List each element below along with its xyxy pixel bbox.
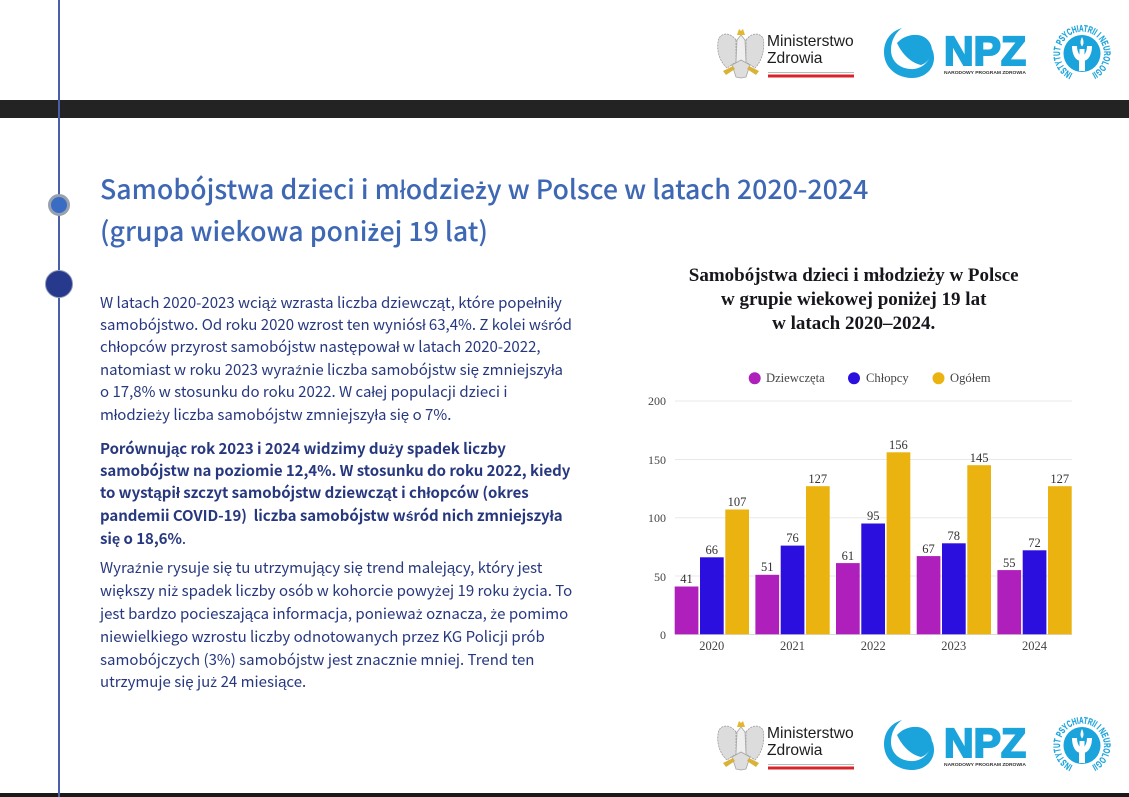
x axis labels: 2023 [941,639,966,653]
logo: NPZ top: NPZ [944,28,1026,74]
logo: Ministerstwo Zdrowia bottom [718,721,854,770]
icon: eagle [718,29,764,78]
y axis and grid: 50 [654,570,666,584]
legend [749,371,991,385]
chart title: Samobójstwa dzieci i młodzieży w Polsce [689,265,1019,286]
logo: NPZ top: NARODOWY PROGRAM ZDROWIA [944,70,1027,75]
timeline with markers [45,0,73,797]
value labels: 72 [1028,536,1041,550]
x axis labels: 2024 [1022,639,1048,653]
bar chart [648,394,1072,653]
logo: Ministerstwo Zdrowia top [718,29,854,78]
paragraph 2 bold: pandemii COVID-19) liczba samobójstw wśród nich zmniejszyła [100,505,563,526]
paragraph 3: jest bardzo pocieszająca informacja, ponieważ oznacza, że pomimo [100,603,568,624]
bars boys [700,524,1046,634]
paragraph 3: samobójczych (3%) samobójstw jest znacznie mniej. Trend ten [100,649,534,670]
top dark band [0,100,1129,118]
value labels: 127 [808,472,827,486]
paragraph 1: chłopców przyrost samobójstw następował w latach 2020-2022, [100,336,541,357]
x axis labels: 2020 [699,639,724,653]
y axis and grid: 0 [660,628,666,642]
x axis labels: 2022 [861,639,886,653]
y axis and grid: 150 [648,453,666,467]
logo: Instytut Psychiatrii i Neurologii bottom: INSTYTUT PSYCHIATRII I NEUROLOGII [1053,716,1111,772]
x axis labels [699,639,1048,653]
logo: Instytut Psychiatrii i Neurologii top: INSTYTUT PSYCHIATRII I NEUROLOGII [1053,24,1111,80]
chart title: w latach 2020–2024. [772,313,935,334]
value labels: 78 [948,529,960,543]
paragraph 2 bold [100,438,570,549]
paragraph 3: Wyraźnie rysuje się tu utrzymujący się trend malejący, który jest [100,557,542,578]
bars total [725,452,1072,634]
paragraph 1: młodzieży liczba samobójstw zmniejszyła się o 7%. [100,404,451,425]
value labels: 67 [922,542,935,556]
paragraph 3: niewielkiego wzrostu liczby odnotowanych przez KG Policji prób [100,626,545,647]
logo: Ministerstwo Zdrowia top: Zdrowia [767,50,823,67]
logo: NPZ bottom: NPZ [944,720,1026,766]
value labels: 127 [1050,472,1069,486]
logo: Ministerstwo Zdrowia bottom: Ministerstwo [767,725,854,742]
paragraph 2 bold: się o 18,6%. [100,528,186,549]
y axis and grid: 200 [648,394,666,408]
logo: NPZ bottom: NARODOWY PROGRAM ZDROWIA [944,762,1027,767]
legend: Chłopcy [866,371,909,385]
value labels: 55 [1003,556,1015,570]
y axis and grid [648,394,1072,642]
x axis labels: 2021 [780,639,805,653]
paragraph 2 bold: to wystąpił szczyt samobójstw dziewcząt i chłopców (okres [100,482,529,503]
value labels: 41 [680,572,693,586]
y axis and grid: 100 [648,511,666,525]
value labels: 51 [761,560,773,574]
bottom dark band [0,793,1129,797]
logo: Ministerstwo Zdrowia top: Ministerstwo [767,33,854,50]
main title [100,168,868,249]
paragraph 1: W latach 2020-2023 wciąż wzrasta liczba dziewcząt, które popełniły [100,292,562,313]
logo: Ministerstwo Zdrowia bottom: Zdrowia [767,742,823,759]
value labels: 66 [706,543,718,557]
icon: eagle [718,721,764,770]
chart title [689,265,1019,334]
chart title: w grupie wiekowej poniżej 19 lat [721,289,987,310]
paragraph 1 [100,292,572,425]
paragraph 3: utrzymuje się już 24 miesiące. [100,671,306,692]
value labels: 107 [728,495,746,509]
paragraph 2 bold: samobójstw na poziomie 12,4%. W stosunku do roku 2022, kiedy [100,460,570,481]
value labels [680,438,1069,586]
paragraph 2 bold: Porównując rok 2023 i 2024 widzimy duży spadek liczby [100,438,506,459]
legend: Ogółem [950,371,991,385]
bars girls [675,556,1021,634]
paragraph 1: o 17,8% w stosunku do roku 2022. W całej populacji dzieci i [100,381,507,402]
value labels: 61 [842,549,854,563]
logo: NPZ top [884,28,1027,78]
paragraph 3 [99,557,572,692]
paragraph 1: natomiast w roku 2023 wyraźnie liczba samobójstw się zmniejszyła [100,359,563,380]
legend: Dziewczęta [766,371,825,385]
value labels: 95 [867,509,879,523]
main title: (grupa wiekowa poniżej 19 lat) [100,210,488,249]
logo: NPZ bottom [884,720,1027,770]
value labels: 156 [889,438,908,452]
value labels: 76 [786,531,799,545]
paragraph 3: większy niż spadek liczby osób w kohorcie powyżej 19 roku życia. To [100,580,572,601]
value labels: 145 [970,451,988,465]
main title: Samobójstwa dzieci i młodzieży w Polsce w latach 2020-2024 [100,168,868,207]
paragraph 1: samobójstwo. Od roku 2020 wzrost ten wyniósł 63,4%. Z kolei wśród [100,314,572,335]
